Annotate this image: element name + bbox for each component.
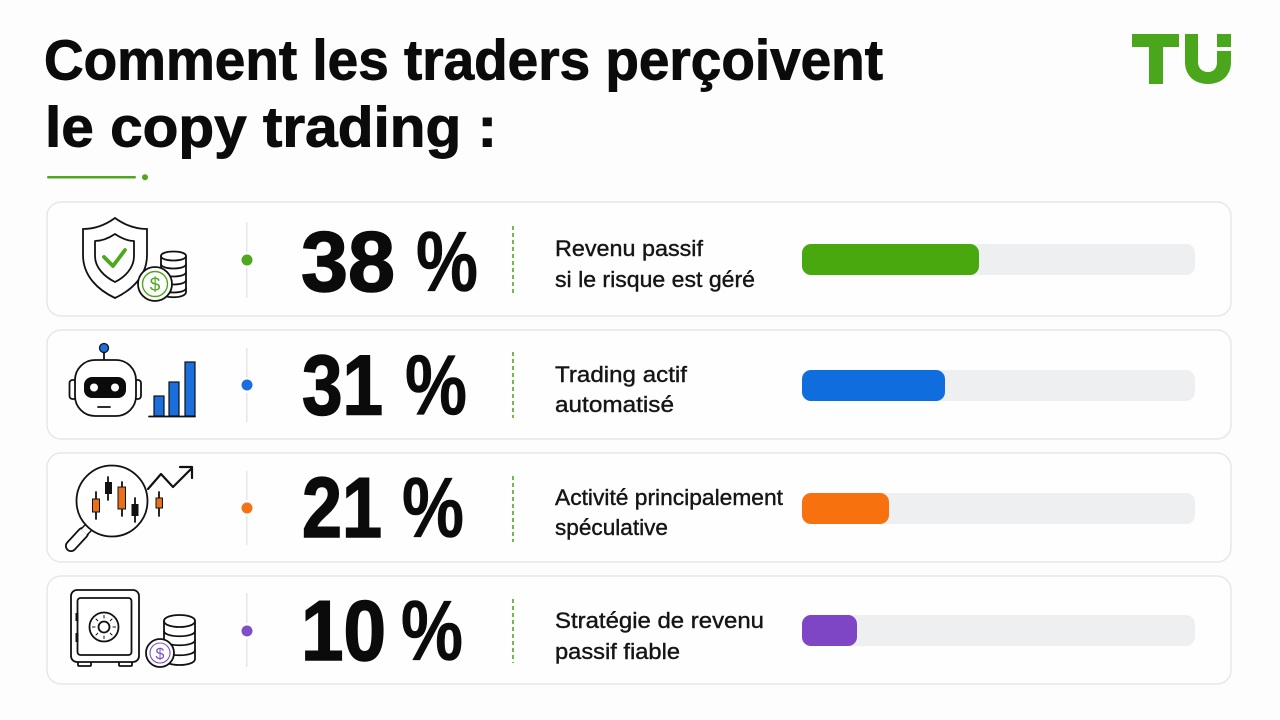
title: le copy trading : <box>45 96 497 160</box>
label: Stratégie de revenu <box>555 608 764 633</box>
value: 38 %: 38 <box>301 215 395 310</box>
value: 38 % <box>301 215 478 310</box>
label: Activité principalement <box>555 485 784 510</box>
separator with blue dot <box>239 348 255 422</box>
value: 21 %: % <box>402 461 464 556</box>
value: 31 %: 31 <box>302 338 383 434</box>
icon: safe and coins: $ <box>156 646 165 663</box>
label: Trading actif <box>555 362 688 387</box>
label: si le risque est géré <box>555 267 755 292</box>
value: 10 %: % <box>401 584 463 679</box>
label: Revenu passif <box>555 236 704 261</box>
separator with orange dot <box>239 471 255 545</box>
logo <box>1132 34 1231 84</box>
label <box>555 485 784 540</box>
dashed divider <box>512 476 514 542</box>
value: 10 %: 10 <box>301 584 386 679</box>
bar: 38 % <box>802 244 1195 275</box>
dashed divider <box>512 599 514 663</box>
separator with green dot <box>239 222 255 298</box>
value: 21 %: 21 <box>302 461 382 556</box>
dashed divider <box>512 352 514 418</box>
panel: revenu fiable <box>47 576 1231 684</box>
icon: robot and bars <box>70 344 195 416</box>
label <box>555 362 688 417</box>
title <box>44 28 883 160</box>
panel: trading actif <box>47 330 1231 439</box>
icon: safe and coins <box>71 590 195 667</box>
title: Comment les traders perçoivent <box>44 28 883 92</box>
bar: 21 % <box>802 493 1195 524</box>
label: passif fiable <box>555 639 680 664</box>
panel: activité spéculative <box>47 453 1231 562</box>
panel: revenu passif <box>47 202 1231 316</box>
label: spéculative <box>555 515 668 540</box>
icon: magnifier and candlesticks <box>71 466 192 546</box>
label: automatisé <box>555 392 674 417</box>
bar: 31 % <box>802 370 1195 401</box>
value: 21 % <box>302 461 464 556</box>
value: 31 %: % <box>405 338 467 434</box>
label <box>555 236 755 292</box>
label <box>555 608 764 664</box>
title underline accent <box>47 174 148 180</box>
icon: shield and coins <box>83 218 186 301</box>
icon: shield and coins: $ <box>150 275 161 296</box>
value: 10 % <box>301 584 463 679</box>
value: 38 %: % <box>416 215 478 310</box>
value: 31 % <box>302 338 467 434</box>
dashed divider <box>512 226 514 294</box>
bar: 10 % <box>802 615 1195 646</box>
separator with purple dot <box>239 593 255 667</box>
